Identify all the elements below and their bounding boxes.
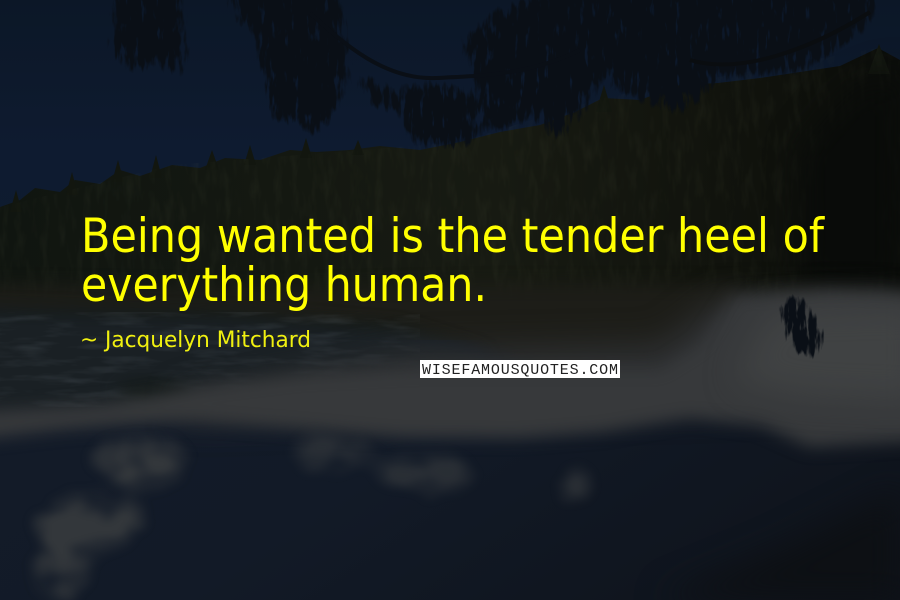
background: hanging fir sprig: [775, 298, 828, 362]
background: overhanging tree foliage: [110, 0, 880, 150]
quote text: Being wanted is the tender heel of: [81, 209, 825, 264]
quote text: everything human.: [81, 258, 487, 313]
background: main curved branch: [310, 13, 580, 78]
watermark: WISEFAMOUSQUOTES.COM: [422, 362, 618, 379]
background: lower left foam: [34, 438, 188, 600]
background: bottom right shadow: [660, 490, 900, 600]
background: right curved branch: [690, 12, 870, 64]
background: mist band: [0, 290, 900, 447]
background: forest tree tips: [10, 44, 890, 212]
background: forest ridge: [0, 48, 900, 340]
background: mid foam drips: [290, 434, 591, 503]
author attribution: ~ Jacquelyn Mitchard: [80, 328, 311, 353]
background: brown riverbank: [0, 285, 740, 380]
background: waterfall highlight: [735, 305, 900, 400]
background: night sky: [0, 0, 900, 300]
background: water ripples: [0, 312, 420, 407]
background: forest texture: [0, 48, 900, 300]
background: dark rock: [117, 380, 193, 404]
background: mist glow: [180, 300, 900, 420]
background: upper water: [0, 308, 500, 420]
background: dark right tree: [800, 70, 900, 290]
